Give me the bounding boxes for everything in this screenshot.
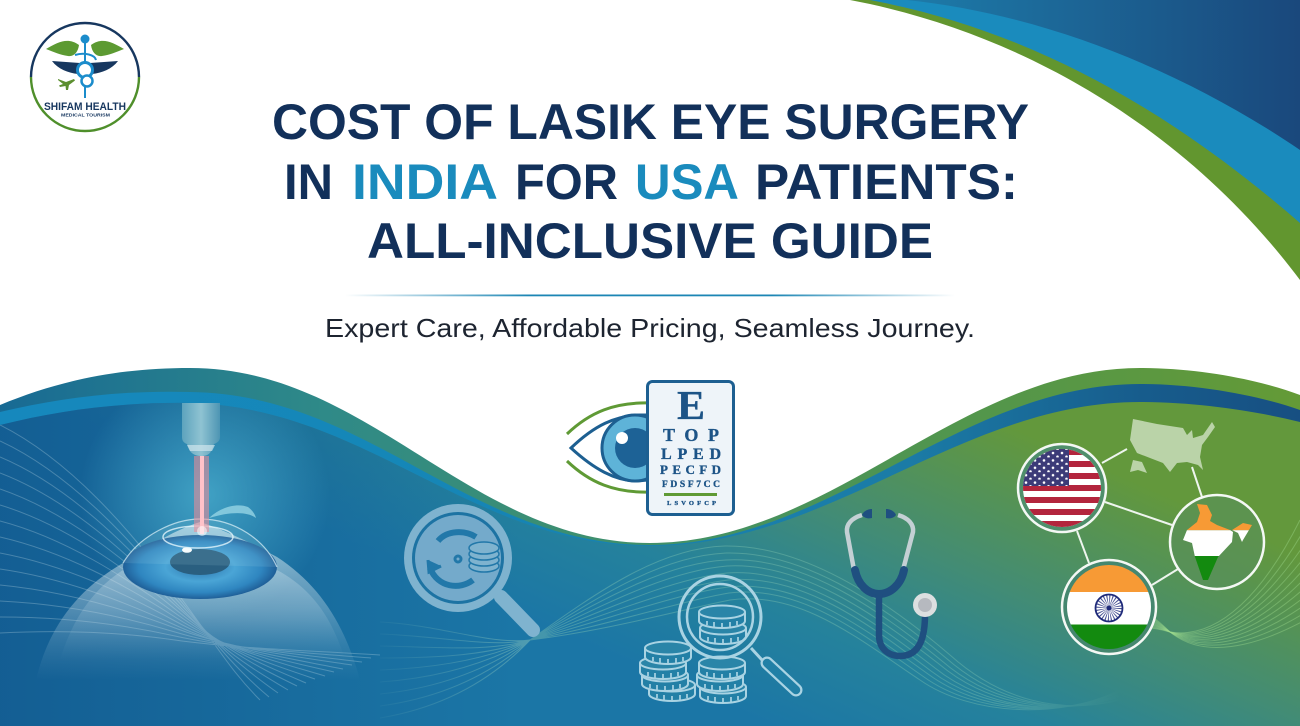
coin stack right	[697, 606, 746, 703]
title: IN	[284, 154, 333, 210]
eye chart card	[648, 382, 734, 514]
eye chart card: E	[677, 382, 705, 428]
laser tube	[182, 403, 220, 456]
connector lines	[1077, 449, 1202, 585]
eye chart card: TOP	[663, 425, 719, 445]
flag: India	[1060, 560, 1160, 654]
laser beam	[194, 456, 209, 536]
title: ALL-INCLUSIVE GUIDE	[367, 213, 933, 269]
title: FOR	[515, 154, 618, 210]
eye chart card: LPED	[661, 446, 721, 463]
eye chart card: FDSF7CC	[662, 480, 720, 490]
eye chart card: PECFD	[660, 462, 721, 477]
coin stack left	[640, 642, 695, 701]
eyeball dome	[36, 522, 360, 680]
bottom wave background	[0, 368, 1300, 726]
icon: coins under magnifier	[640, 576, 796, 703]
title	[272, 94, 1029, 269]
map: United States	[1130, 419, 1215, 473]
refresh arrows	[428, 532, 476, 586]
subtitle: Expert Care, Affordable Pricing, Seamless Journey.	[325, 313, 975, 343]
icon: magnifier with refresh arrows and coins	[404, 504, 533, 630]
logo: Shifam Health	[30, 22, 140, 132]
illustration: laser eye surgery	[36, 403, 360, 680]
title: COST OF LASIK EYE SURGERY	[272, 94, 1029, 150]
icon: logo caduceus	[75, 34, 96, 98]
title divider	[345, 294, 955, 296]
title: INDIA	[352, 154, 498, 210]
map badge: India tricolour	[1170, 495, 1264, 589]
cornea flap	[123, 505, 277, 567]
title: USA	[635, 154, 739, 210]
coin stack	[469, 542, 499, 572]
top right corner wave	[850, 0, 1300, 280]
icon: stethoscope	[847, 509, 937, 656]
Ashoka chakra	[1096, 594, 1122, 622]
icon: logo green wings	[46, 41, 124, 56]
logo tagline: MEDICAL TOURISM	[61, 112, 110, 118]
magnifier outline	[679, 576, 796, 690]
logo name: SHIFAM HEALTH	[44, 101, 126, 113]
flowing line pattern	[0, 425, 1300, 718]
iris	[123, 535, 277, 599]
icon: logo navy wings	[52, 61, 118, 74]
flag: USA	[1018, 444, 1110, 532]
icon: eye and eye chart	[567, 382, 734, 514]
title: PATIENTS:	[755, 154, 1018, 210]
eye chart card: LSVOFCP	[667, 500, 716, 507]
icon: logo plane	[58, 79, 75, 90]
icon: eye	[566, 401, 646, 494]
